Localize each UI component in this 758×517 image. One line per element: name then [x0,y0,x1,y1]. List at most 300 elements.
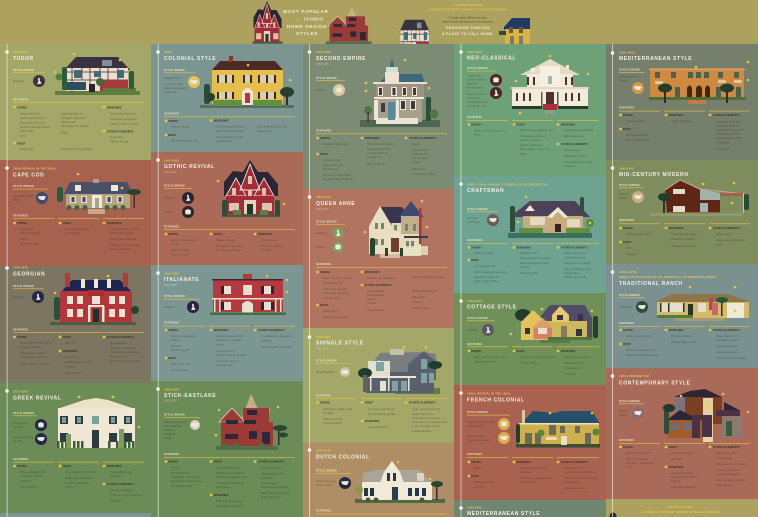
features: WINDOWS [669,226,684,230]
features: Brick, wood, stucco [626,334,652,338]
features: Wide overhanging eaves [626,353,660,357]
features: and wooden pilasters [20,355,49,359]
house: craftsman [508,196,594,238]
features: Half-timbered or [61,112,83,116]
style origin: STYLE ORIGIN [467,208,488,211]
features: arched top [367,155,382,159]
features: Asymmetrical [367,289,385,293]
features: Single floor plan [716,344,738,348]
panel: italianate [151,265,303,381]
features: SIDING [471,246,481,250]
features: Courtyard [716,140,730,144]
heading [13,266,45,278]
features: Attached garage [716,350,738,354]
features: Ornate gables [412,306,431,310]
style origin: STYLE ORIGIN [13,412,34,415]
features: Reproducing the [412,412,434,416]
style origin: STYLE ORIGIN [619,184,640,187]
features: ROOF [168,356,177,360]
features: panes [216,342,225,346]
subtitle text: PROVIDING FAMILIES [446,26,490,30]
features: Sliding glass doors [671,244,697,248]
features: Porches with ornamental [564,476,597,480]
style origin: STYLE ORIGIN [619,294,640,297]
features: WINDOWS [561,349,576,353]
features: FEATURES [619,439,634,442]
features: SIDING [168,119,178,123]
features: Brick, stone, or wood [323,276,351,280]
style origin: east-coast states [164,86,187,90]
features: Double French windows [520,476,553,480]
style origin: STYLE ORIGIN [467,317,488,320]
style origin: France [316,245,326,249]
features: side of the entry door [216,129,244,133]
features: Ornamental railings [716,136,743,140]
features: Red or terra cotta [626,138,650,142]
panel: gothic revival [151,152,303,265]
features: Square tower or cupola [261,345,292,349]
features [619,439,750,489]
features: Flat bands, pediments [110,350,140,354]
features: Mixed of materials [626,451,651,455]
style origin: United [619,409,628,413]
features: Exposed rafters at [474,275,499,279]
features: Arched or lancet [261,244,283,248]
footer text: A NUMBER OF DIFFERENT HOUSING STYLES HAVE EMERGED [642,510,720,514]
panel: craftsman [454,176,606,293]
heading: GREEK REVIVAL [13,396,62,402]
features: FEATURES [619,106,634,110]
features: Brick, stone or stucco [20,362,49,366]
style origin: STYLE ORIGIN [13,69,34,72]
style origin: and the [467,82,477,86]
features [316,510,447,514]
house: cottage [510,305,598,343]
features: finish band [323,167,338,171]
features [467,343,599,376]
features: Steep and medium [65,227,91,231]
features: WINDOWS [365,136,380,140]
features: wood in the decorative [20,125,50,129]
heading: 1600s REVIVAL IN THE 1930s [13,166,56,170]
style origin: California and [619,74,638,78]
house: ranch [656,286,750,321]
features: OTHER ELEMENTS [258,460,285,464]
features: Flat or hip roof [171,362,191,366]
features [316,263,447,319]
heading: MID-CENTURY MODERN [619,172,688,178]
features: Local or recycled [716,468,739,472]
features: WINDOWS [561,122,576,126]
heading [316,50,366,66]
style origin: United [619,192,628,196]
features: elements, wood, and [626,461,654,465]
features: OTHER ELEMENTS [713,445,740,449]
features: OTHER ELEMENTS [561,460,588,464]
style origin: STYLE ORIGIN [316,220,337,224]
style origin [164,184,194,218]
features: eave [520,152,527,156]
heading: MEDITERRANEAN STYLE [467,511,540,517]
features: ornate [412,160,421,164]
features: Large windows [368,425,389,429]
features: windows [520,470,532,474]
timeline lines [7,44,613,517]
features: first story stucco or [20,120,45,124]
features [467,116,599,168]
features: walls nailed in rows [323,291,349,295]
heading: TRADITIONAL RANCH [619,281,683,287]
features: Wooden clapboard [323,142,348,146]
features: Brick wall in an [20,112,40,116]
header banner [0,0,758,53]
features: Steep gabled roof [216,466,240,470]
features: Elaborately decorated [261,491,291,495]
features: ROOF [320,152,329,156]
features: courtyards centered in [716,128,746,132]
features: columns [564,164,576,168]
features: top and base of the roof [323,177,355,181]
features [13,458,144,503]
heading: 1900-1930 [467,50,482,54]
features: ROOF [471,258,480,262]
features: Angled bay windows [367,276,395,280]
features: Often painted white [20,470,46,474]
style origin [13,185,48,204]
features: Brick or stone [171,252,190,256]
heading: 1918-1940s [619,50,636,54]
features: Casement windows [110,112,137,116]
heading: 1840-1885 [164,272,179,276]
timeline dots [5,50,614,510]
heading: 1600s [164,50,173,54]
heading [467,50,516,62]
features: FEATURES [619,219,634,222]
panel: shingle style [303,328,454,443]
features: ROOF [168,133,177,137]
features: Ornamental dentils [20,351,46,355]
heading: 1600s, REVIVAL IN THE 1920s [467,392,511,396]
house: mid-century [650,180,749,216]
features: Shutters on both sides [110,243,140,247]
features: Little or no trim [323,417,343,421]
features: Ornament [716,147,730,151]
features: Natural light [716,456,732,460]
features: second floor [216,139,232,143]
style origin: New Jersey [316,483,332,487]
heading [164,158,215,174]
style origin: Also popular in [467,92,487,96]
features: Decorative windows [216,504,243,508]
heading: 1920-1940 [467,506,482,510]
features: windows [65,364,77,368]
features: WINDOWS [365,419,380,423]
features: galleries on [412,152,428,156]
features: WINDOWS [107,105,122,109]
features: Side-gabled stick [261,472,284,476]
features: Asymmetrical gables [368,412,396,416]
features: FEATURES [467,116,482,119]
title text: 100 [295,18,301,22]
features: WINDOWS [516,460,531,464]
features: or stone trim [323,296,340,300]
heading: FRENCH COLONIAL [467,398,525,404]
house: second empire [360,58,440,127]
features: Symmetrical [564,148,581,152]
style origin: Gained style in [467,434,487,438]
features [619,106,750,151]
features: OTHER ELEMENTS [107,482,134,486]
heading [619,270,716,287]
features: Brick [20,237,27,241]
features: WINDOWS [214,493,229,497]
features: FEATURES [164,112,179,116]
house: mediterranean [649,61,749,104]
features: SIDING [17,221,27,225]
features: Irregularly shaped [671,485,695,489]
features: OTHER ELEMENTS [258,328,285,332]
features: trim atop roof ridge [216,248,242,252]
features: FEATURES [13,458,28,461]
features: ROOF [365,400,374,404]
style origin: STYLE ORIGIN [619,68,640,72]
features: Smooth [171,344,182,348]
features [316,394,448,433]
features: OTHER ELEMENTS [713,328,740,332]
heading: EARLY 1900s, MAKING A COMEBACK IN CURRENT DAY [467,182,549,186]
subtitle text: A PLACE TO CALL HOME. [442,32,494,36]
features: WINDOWS [63,349,78,353]
features: generally around [716,124,739,128]
features: SIDING [320,136,330,140]
heading: COTTAGE STYLE [467,304,517,310]
features: Balconies [412,295,426,299]
features [467,239,599,283]
features: Expressive [564,271,579,275]
features: crowned trim on [367,151,389,155]
features: lower edge, along roof [520,147,550,151]
style origin [467,208,499,226]
panel: neo-classical [454,44,606,176]
features: Casement [65,355,79,359]
heading: ITALIANATE [164,277,199,283]
features: Eco-friendly materials [716,478,745,482]
features: Usually long and thin [216,334,244,338]
features: Stucco, plaster [626,119,646,123]
features: Towers [367,297,377,301]
features: ROOF [320,303,329,307]
style origin: STYLE ORIGIN [164,295,185,298]
heading: 1840-1880 [164,158,179,162]
features: shingles on gable ends [216,475,247,479]
house: dutch colonial [355,461,445,503]
heading: 1700-1830 [13,266,28,270]
style origin [619,68,645,94]
features: Complex intersecting [216,481,244,485]
style origin: STYLE ORIGIN [316,77,337,80]
heading [13,390,62,402]
features: Mainly timber [171,248,189,252]
title text: HOME DESIGN [287,24,327,29]
features: symmetry and squareness [412,420,448,424]
features: with shutters [520,480,537,484]
features: wood [474,132,482,136]
features: Brick, smooth stucco, or [474,128,506,132]
icon: footer house [610,512,616,517]
features [467,453,599,490]
style origin [619,294,648,313]
heading: 1945-1965 [619,166,634,170]
style origin: Mid-19th century [164,420,187,424]
heading: CRAFTSMAN [467,188,504,194]
style origin: Midwest [164,432,175,436]
icon: gothic house [252,1,283,44]
panel: cape cod [0,160,151,266]
panel: mediterranean style bottom [454,500,606,517]
features: FEATURES [467,239,482,242]
features: windows [110,474,122,478]
heading [467,392,525,404]
features: Decorative trim [323,281,344,285]
features: Multi-paned top sashes [520,256,552,260]
features: Wood, glass, steel [626,232,651,236]
house: french colonial [516,410,600,448]
style origin: STYLE ORIGIN [13,285,34,288]
heading: 1855-1885 [316,50,331,54]
features: Hip roof [65,341,76,345]
heading: NEO-CLASSICAL [467,56,516,62]
heading [619,166,688,178]
features: tall, patterned gables [61,124,89,128]
features: of trim [65,485,74,489]
panel: mediterranean style [606,44,758,160]
features: FEATURES [13,214,28,218]
style origin [13,69,45,87]
features: ROOF [516,349,525,353]
features: Flat roof [671,457,682,461]
heading: 1500-1800 [13,50,28,54]
panel: second empire [303,44,454,189]
features: SIDING [17,335,27,339]
style origin: the US [13,439,22,443]
features: Five windows on the [216,135,244,139]
heading: 1855-1885 [316,62,329,66]
style origin [164,295,200,313]
features: Tall arched or round [520,466,547,470]
features: Stick-styled trim [261,466,283,470]
features: SIDING [168,328,178,332]
features: stone [171,242,179,246]
features: Wrap-around porch [412,289,438,293]
features: Exposed roof rafters [564,261,592,265]
features: sashes [520,265,530,269]
features [619,219,750,256]
features: Wooden clapboard [171,334,196,338]
features: Symmetrical [110,341,127,345]
style origin: STYLE ORIGIN [316,360,337,362]
features: Bay windows [367,293,385,297]
features: Balanced and [564,466,583,470]
features: Fish-scale shingle [323,287,347,291]
icon: stick house [326,7,372,44]
style origin: England [467,328,478,332]
heading [316,448,370,460]
features: Full width portico with [564,160,593,164]
features: of the entrance [110,247,130,251]
features: WINDOWS [258,232,273,236]
features: Detail molding at [520,143,543,147]
features: Gazebo [412,300,423,304]
features: Flat [626,246,631,250]
style origin: Eastern [164,428,175,432]
features: FEATURES [13,98,28,102]
style origin [619,400,644,419]
style origin: New England [164,424,182,428]
heading [164,388,216,402]
features: Cross gables [520,360,538,364]
style origin: Inspired by [467,74,482,78]
subtitle text [428,3,506,36]
features: Natural or single color [323,407,352,411]
features: double-hung or arched [216,353,247,357]
features: Turrets [367,301,377,305]
style origin: New England [316,370,334,374]
features: windows at upper stair [110,359,140,363]
style origin: Eastern U.S. [164,76,181,80]
style origin [467,67,502,108]
features: FEATURES [467,343,482,346]
style origin: States [619,196,628,200]
panel: tudor [0,44,151,160]
features: Steep and high [474,480,495,484]
panel: greek revival [0,383,151,513]
house: italianate [210,274,288,315]
features: Arched dormers [564,486,586,490]
features: SIDING [320,400,330,404]
style origin: STYLE ORIGIN [164,184,185,188]
features: Double-hung [520,251,538,255]
features: Small panes [564,366,581,370]
heading: DUTCH COLONIAL [316,454,370,460]
features: ROOF [63,221,72,225]
heading [467,182,549,194]
heading [164,272,199,287]
heading: 1840-1885 [164,283,177,287]
features: Fan window above the [257,124,287,128]
heading: 1880-1910 [316,195,331,199]
features: Transom windows [671,237,696,241]
features: Wood or stone [474,251,494,255]
features: Steep pitch [323,309,338,313]
style origin [316,360,351,377]
features: Brick or stone [171,348,190,352]
features: with heavy, wooden [216,338,242,342]
style origin [619,184,644,203]
style origin: STYLE ORIGIN [316,470,337,472]
features: Hip roof [474,485,485,489]
style origin: STYLE ORIGIN [467,411,488,414]
features: Low-pitched roof [626,133,648,137]
panel: stick-eastlake [151,381,303,517]
features: Minimal ornamentation [716,356,747,360]
title text [283,9,329,36]
features: building materials [716,472,740,476]
features: Raw, rustic in L or [716,334,740,338]
features: FEATURES [316,263,331,266]
heading: WIDELY POPULAR IN THE US, ESPECIALLY IN SUBURBAN AREAS [619,275,716,279]
features: Round cornice at the [323,173,351,177]
panel: contemporary style [606,368,758,499]
